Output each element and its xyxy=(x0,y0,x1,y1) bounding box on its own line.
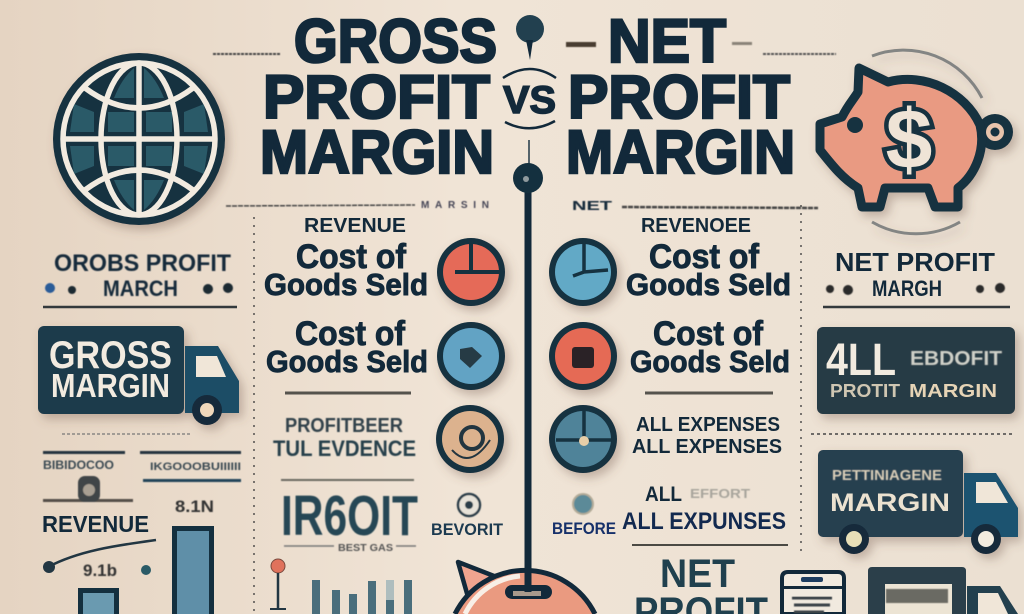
left list: gross items: Cost of xyxy=(295,315,406,353)
left dials xyxy=(436,238,505,473)
left list: gross items: BEVORIT xyxy=(431,520,504,539)
vs badge: VS xyxy=(503,79,556,122)
left list: gross items xyxy=(264,215,504,554)
left list: gross items: Cost of xyxy=(296,238,407,276)
icon: top pin xyxy=(516,15,544,60)
truck: margin: MARGIN xyxy=(830,489,950,517)
right list: net items: NET xyxy=(660,552,735,596)
right list: net items: ALL xyxy=(645,483,682,506)
right panel heading: NET PROFIT xyxy=(835,247,995,277)
right list: net items: REVENOEE xyxy=(641,215,751,237)
truck: margin: PETTINIAGENE xyxy=(832,467,942,484)
chart: revenue bars: 9.1b xyxy=(83,561,117,580)
title: net profit margin: PROFIT xyxy=(568,63,790,131)
panel: all profit margin xyxy=(817,327,1015,414)
right list: net items: Cost of xyxy=(653,315,764,353)
right dials xyxy=(549,238,617,473)
panel: all profit margin: EBDOFIT xyxy=(910,348,1002,370)
chart: small bars with pin xyxy=(270,559,412,614)
dotted divider xyxy=(811,433,1015,435)
small bullseye icon xyxy=(458,494,480,516)
truck: gross margin: GROSS xyxy=(49,334,172,377)
title: gross profit margin: GROSS xyxy=(294,7,497,75)
left panel heading xyxy=(43,250,237,307)
left panel heading: MARCH xyxy=(103,276,178,301)
icon: bottom piggy bank xyxy=(455,540,595,614)
left list: gross items: Goods Seld xyxy=(264,267,428,302)
title: gross profit margin: PROFIT xyxy=(263,63,490,131)
truck: margin xyxy=(818,450,1018,554)
small target icon xyxy=(573,494,593,514)
panel: all profit margin: MARGIN xyxy=(909,381,997,401)
title: net profit margin: MARGIN xyxy=(566,118,795,186)
truck: gross margin xyxy=(38,326,239,425)
chart: revenue bars xyxy=(42,497,214,614)
right list: net items: Cost of xyxy=(649,238,760,276)
left list: gross items: TUL EVDENCE xyxy=(273,436,416,461)
truck: gross margin: MARGIN xyxy=(51,367,170,404)
small caption: net: NET xyxy=(572,198,612,213)
truck: cropped xyxy=(868,567,1018,614)
left list: gross items: REVENUE xyxy=(304,215,406,237)
right list: net items: Goods Seld xyxy=(626,267,791,302)
right panel heading: MARGH xyxy=(872,276,942,301)
left list: gross items: PROFITBEER xyxy=(285,415,404,437)
left list: gross items: BEST GAS xyxy=(338,543,393,554)
title: net profit margin: NET xyxy=(608,7,726,75)
small caption: gross: MARSIN xyxy=(421,200,489,211)
icon: globe xyxy=(53,53,225,225)
right panel heading xyxy=(823,247,1010,307)
table: small left data xyxy=(43,451,241,502)
title: gross profit margin: MARGIN xyxy=(260,118,494,186)
icon: piggy bank xyxy=(820,50,1013,234)
center timeline xyxy=(513,140,543,592)
table: small left data: IKGOOOBUIIIIII xyxy=(150,461,241,473)
panel: all profit margin: PROTIT xyxy=(830,381,900,401)
chart: revenue bars: REVENUE xyxy=(42,511,149,537)
dotted column dividers xyxy=(254,205,801,614)
right list: net items: EFFORT xyxy=(690,486,750,501)
small caption: net xyxy=(566,42,836,213)
left panel heading: OROBS PROFIT xyxy=(54,250,231,277)
icon: piggy bank: $ xyxy=(886,92,932,186)
icon: document xyxy=(782,572,844,614)
right list: net items: Goods Seld xyxy=(630,344,790,379)
chart: revenue bars: 8.1N xyxy=(175,497,214,516)
right list: net items: BEFORE xyxy=(552,519,616,538)
title: gross profit margin xyxy=(260,7,497,186)
table: small left data: BIBIDOCOO xyxy=(43,458,114,472)
right list: net items: ALL EXPUNSES xyxy=(622,508,786,535)
left list: gross items: Goods Seld xyxy=(266,344,428,379)
right list: net items: ALL EXPENSES xyxy=(636,414,780,436)
left list: gross items: IR6OIT xyxy=(281,484,418,548)
panel: all profit margin: 4LL xyxy=(826,334,896,385)
right list: net items xyxy=(552,215,791,614)
right list: net items: ALL EXPENSES xyxy=(632,436,782,458)
title: net profit margin xyxy=(566,7,795,186)
